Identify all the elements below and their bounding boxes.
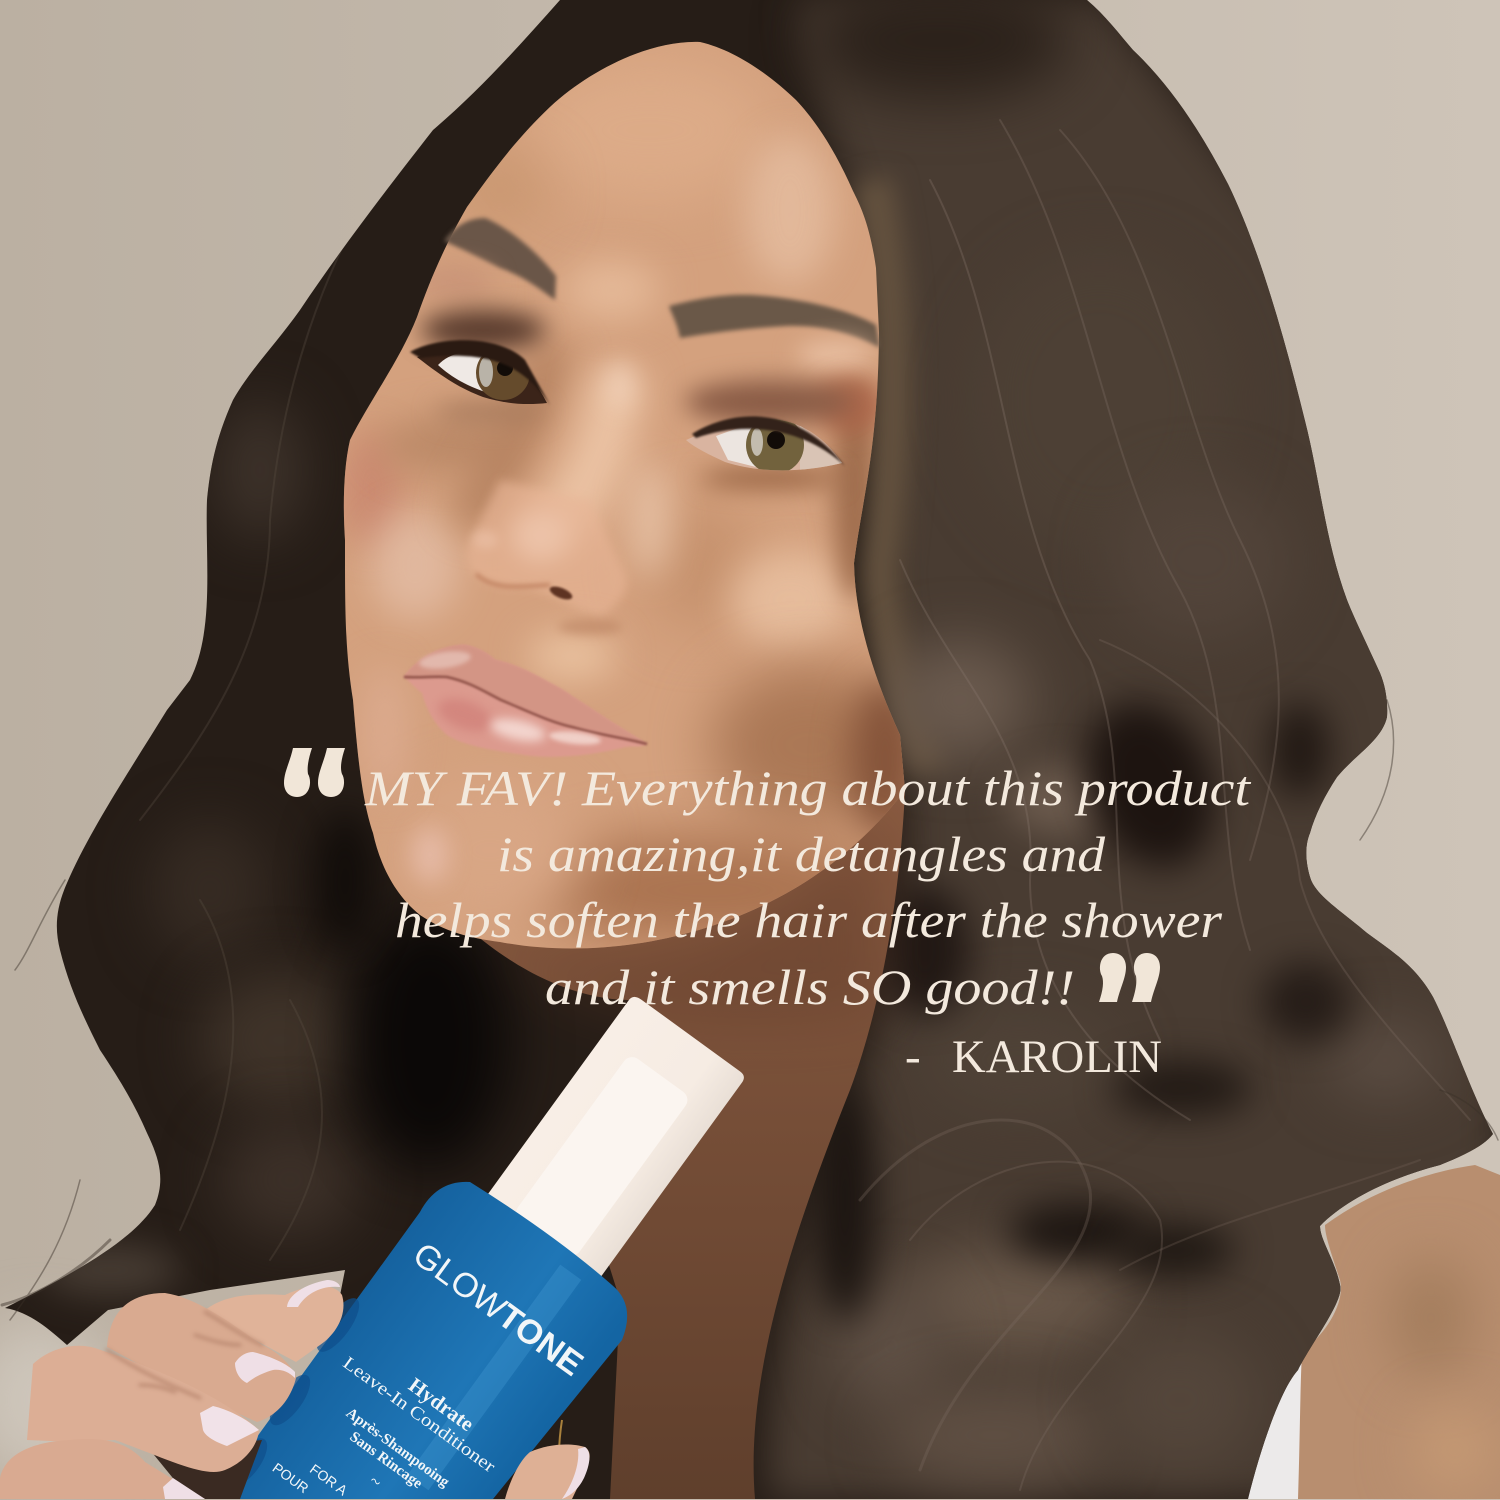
face: [320, 30, 920, 970]
necklace: [559, 1420, 562, 1495]
testimonial quote: [364, 760, 1251, 1015]
bottle label: POUR: [270, 1459, 312, 1496]
opening quote mark: [284, 748, 345, 797]
nostril: [548, 585, 574, 601]
bottle label: Après-Shampooing: [343, 1405, 452, 1491]
bottle label: [261, 1235, 590, 1500]
bottle body: [212, 1182, 627, 1499]
right shoulder: [1298, 1165, 1500, 1499]
shadow between fingers: [150, 1440, 262, 1499]
attribution: -: [905, 1031, 921, 1083]
attribution: KAROLIN: [952, 1031, 1162, 1083]
eye left: [410, 340, 550, 405]
little finger and palm: [0, 1439, 205, 1499]
bottle label: FOR A: [307, 1461, 351, 1499]
flyaway strands at hair edges: [2, 700, 1498, 1320]
closing quote mark: [1099, 953, 1160, 1002]
face skin shading: [320, 30, 920, 970]
jaw shadow on neck: [500, 800, 880, 1021]
ring finger: [27, 1346, 259, 1472]
bottle label: ~: [366, 1470, 386, 1493]
bottle label: Sans Rincage: [347, 1429, 425, 1492]
fingernail: ring: [200, 1406, 259, 1446]
eye socket shadow left: [417, 266, 545, 422]
fingernail: little: [163, 1478, 205, 1499]
finger shadows on bottle: [222, 1292, 367, 1492]
bottle label: Leave-In Conditioner: [339, 1352, 499, 1476]
thumb nail: [562, 1447, 589, 1499]
fingernail: middle: [235, 1352, 295, 1383]
fingernail: index: [287, 1280, 340, 1307]
testimonial quote: and it smells SO good!!: [545, 959, 1075, 1015]
nose shading and highlights: [468, 345, 555, 525]
white top: [1240, 1350, 1310, 1499]
index finger: [205, 1286, 343, 1362]
hand holding bottle: [0, 1280, 590, 1499]
eye right: [686, 416, 845, 474]
eyebrow left: [444, 218, 556, 300]
thumb: [505, 1444, 590, 1499]
product bottle: [212, 994, 747, 1500]
bottle cap: [479, 994, 747, 1288]
lips: [404, 645, 647, 757]
knuckle creases: [107, 1312, 262, 1398]
testimonial quote: MY FAV! Everything about this product: [364, 760, 1251, 816]
backdrop light patch behind hand: [0, 1320, 110, 1480]
bottle label: Hydrate: [404, 1373, 479, 1436]
bottle label: GLOWTONE: [406, 1235, 590, 1384]
eyebrow right: [669, 295, 880, 348]
neck: [470, 790, 905, 1499]
eye socket shadow right: [685, 341, 886, 488]
middle finger: [107, 1293, 296, 1422]
body highlight: [407, 1265, 581, 1490]
testimonial quote: helps soften the hair after the shower: [395, 892, 1223, 948]
testimonial quote: is amazing,it detangles and: [497, 826, 1106, 882]
